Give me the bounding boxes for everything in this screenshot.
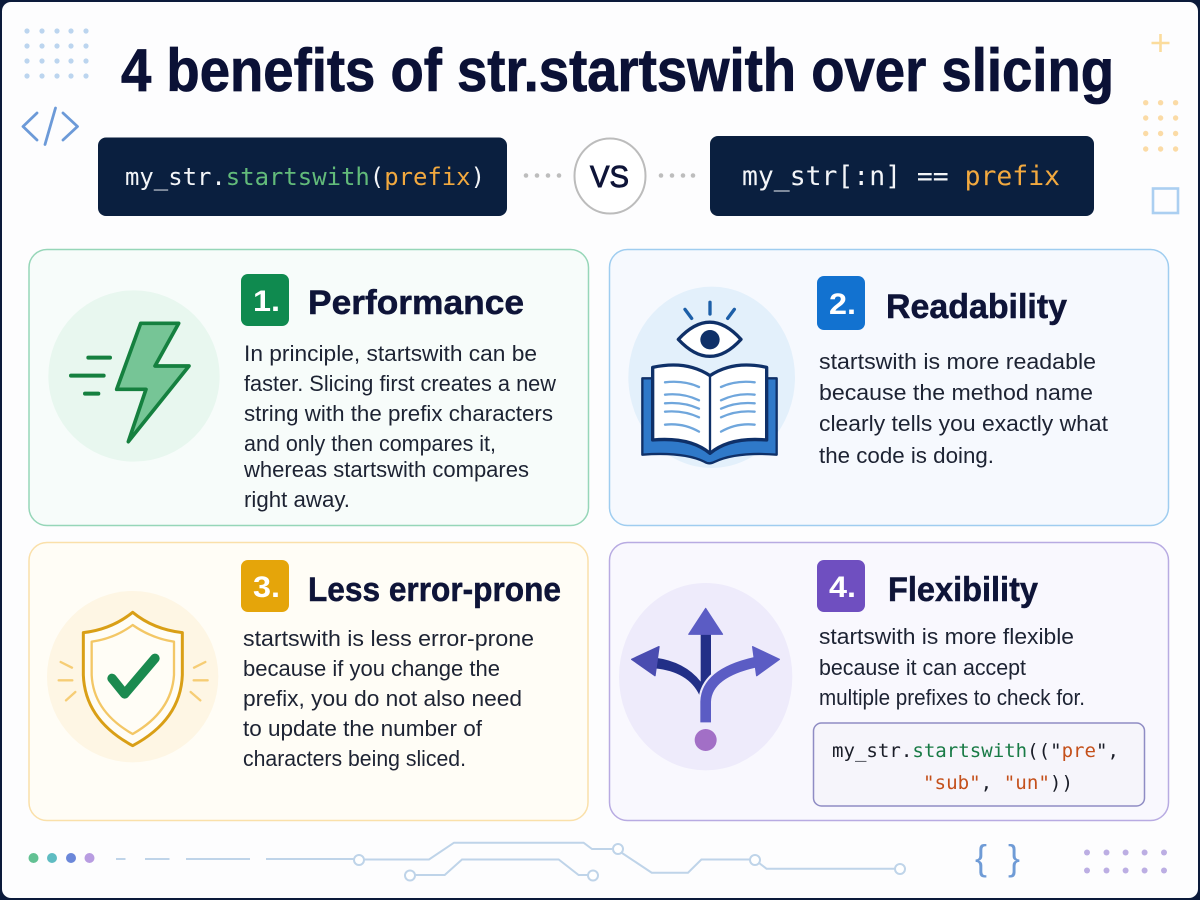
body text: whereas startswith compares — [243, 457, 529, 482]
badge 1: 1. — [253, 285, 280, 318]
icon: branching arrows — [619, 583, 792, 770]
body text: and only then compares it, — [244, 431, 496, 456]
badge 3: 3. — [253, 571, 280, 604]
panel: performance — [29, 250, 588, 526]
body text: prefix, you do not also need — [243, 686, 522, 711]
footer: curly braces: } — [1008, 837, 1020, 878]
badge 3 — [241, 560, 289, 612]
heading: Performance — [308, 284, 524, 322]
decoration: top-right dot grid — [1143, 100, 1178, 152]
footer: circuit lines — [116, 843, 905, 880]
badge 2: 2. — [829, 288, 856, 321]
panel: less error-prone — [29, 542, 588, 820]
body text: clearly tells you exactly what — [819, 411, 1109, 436]
footer: curly braces — [975, 837, 1020, 878]
icon: square outline — [1153, 188, 1178, 213]
decoration: top-left dot grid — [24, 28, 89, 79]
panel: readability — [610, 250, 1168, 526]
title: 4 benefits of str.startswith over slicing — [121, 37, 1114, 104]
code box — [814, 723, 1144, 806]
icon: code tag — [23, 108, 78, 144]
body text — [819, 624, 1085, 710]
code box: "sub", "un")) — [923, 772, 1073, 794]
heading: Flexibility — [888, 571, 1038, 609]
footer: curly braces: { — [975, 837, 987, 878]
body text: because it can accept — [819, 655, 1027, 680]
footer: status dots — [28, 853, 94, 863]
icon: eye over open book — [628, 287, 795, 468]
body text — [243, 626, 534, 771]
connector dots: right — [659, 173, 695, 178]
VS badge — [574, 138, 646, 214]
badge 4 — [817, 560, 865, 612]
body text: string with the prefix characters — [244, 401, 553, 426]
heading: Readability — [886, 288, 1067, 326]
badge 4: 4. — [829, 571, 856, 604]
icon: plus — [1152, 34, 1170, 52]
body text: startswith is more readable — [819, 349, 1096, 374]
connector dots: left — [524, 173, 561, 178]
code box: my_str.startswith(("pre", — [832, 740, 1119, 762]
body text — [243, 341, 557, 512]
body text: startswith is more flexible — [819, 624, 1074, 649]
code pill: startswith: my_str.startswith(prefix) — [125, 163, 485, 191]
body text: multiple prefixes to check for. — [819, 685, 1085, 710]
code pill: startswith — [98, 138, 507, 216]
icon: lightning bolt — [48, 290, 220, 462]
body text: to update the number of — [243, 716, 483, 741]
body text: startswith is less error-prone — [243, 626, 534, 651]
icon: shield with check — [47, 591, 218, 762]
footer: dot grid — [1084, 850, 1167, 874]
body text: because if you change the — [243, 656, 500, 681]
body text: right away. — [244, 487, 350, 512]
heading: Less error-prone — [308, 571, 561, 609]
VS badge: VS — [590, 159, 629, 194]
body text: characters being sliced. — [243, 746, 466, 771]
panel: flexibility — [610, 542, 1168, 820]
badge 2 — [817, 276, 865, 330]
body text: In principle, startswith can be — [244, 341, 537, 366]
code pill: slicing: my_str[:n] == prefix — [742, 161, 1060, 192]
body text: because the method name — [819, 380, 1093, 405]
badge 1 — [241, 274, 289, 326]
body text: faster. Slicing first creates a new — [244, 371, 557, 396]
body text: the code is doing. — [819, 443, 994, 468]
code pill: slicing — [710, 136, 1094, 216]
body text — [819, 349, 1109, 468]
